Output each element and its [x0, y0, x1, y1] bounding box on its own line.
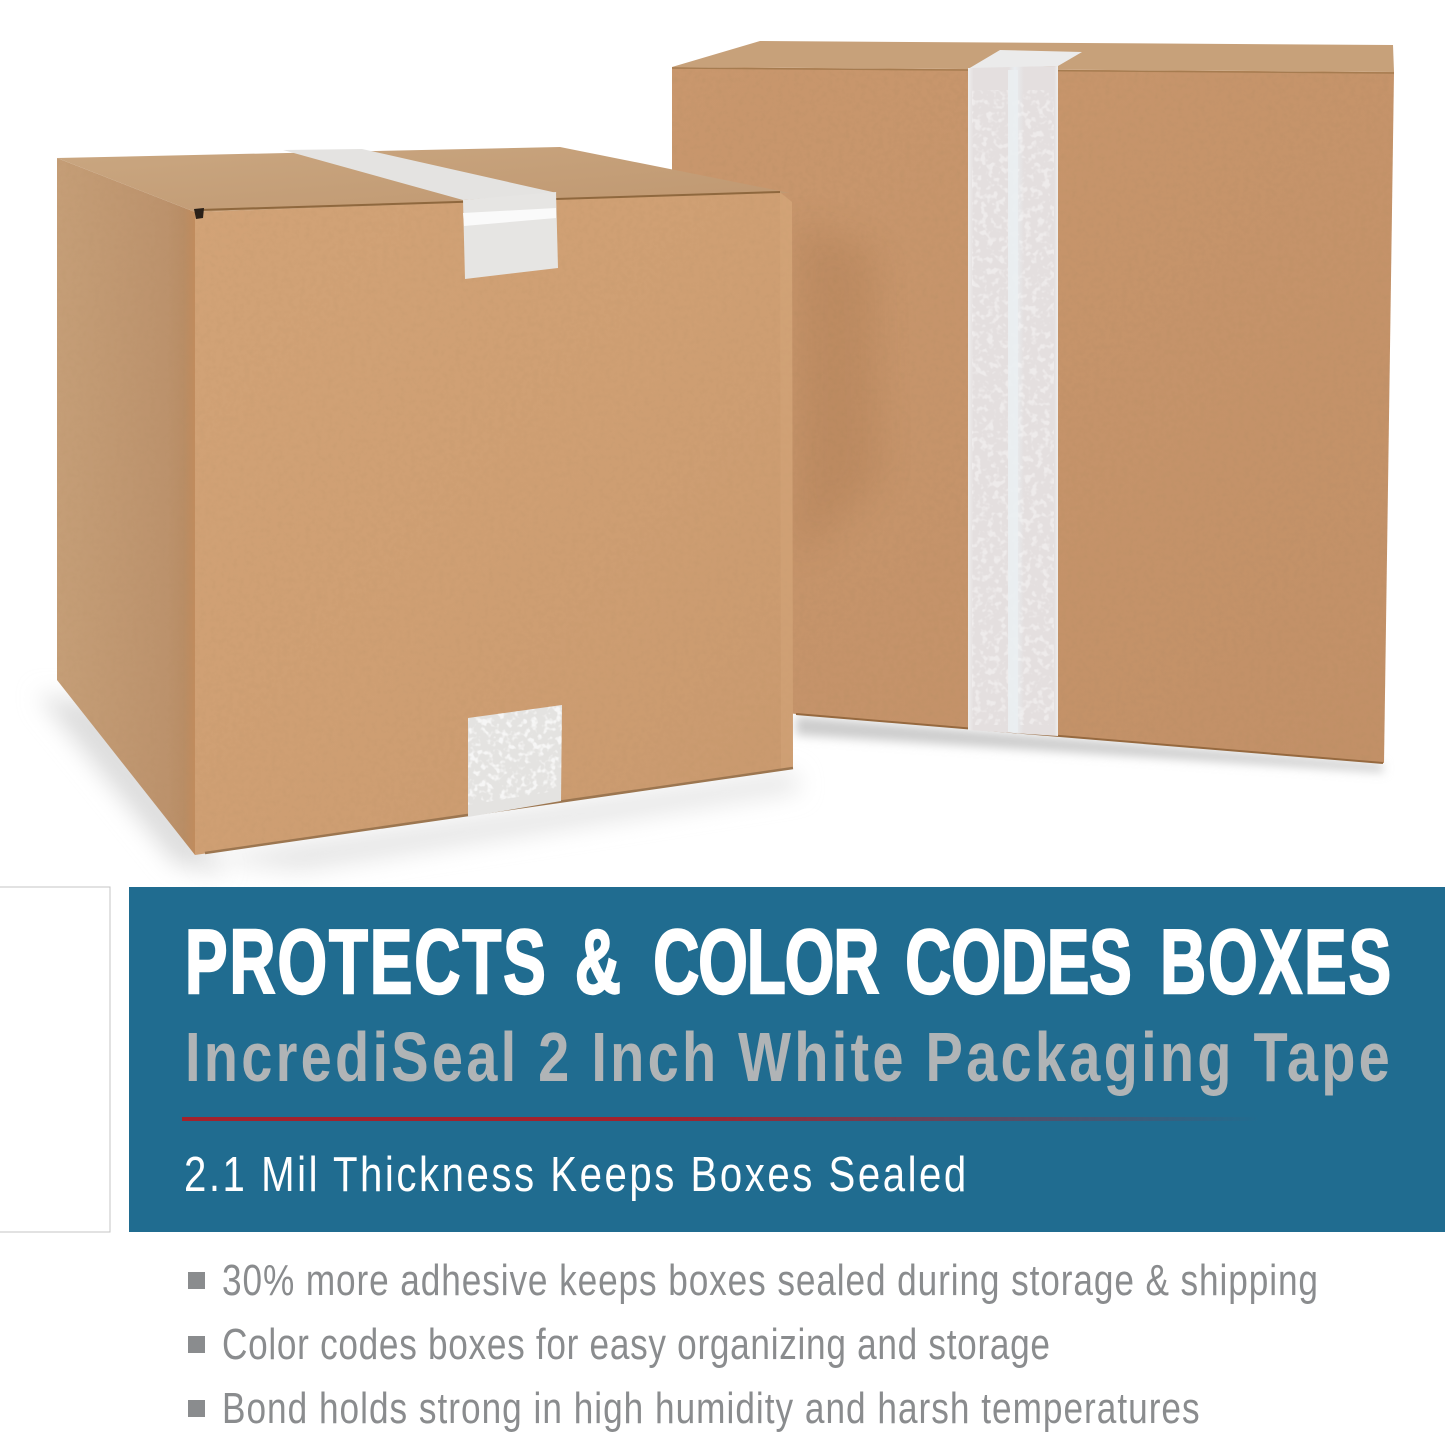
panel: blue banner	[129, 887, 1445, 1232]
heading: &	[575, 911, 623, 1013]
bullet 1: 30% more adhesive keeps boxes sealed during storage & shipping	[222, 1256, 1318, 1305]
red divider	[182, 1117, 1260, 1121]
box: front left	[57, 147, 793, 855]
subheading: IncrediSeal 2 Inch White Packaging Tape	[185, 1019, 1390, 1096]
tape: bottom strip on front box	[468, 705, 562, 817]
photo: cardboard boxes sealed with white tape	[38, 41, 1394, 872]
empty outlined panel	[0, 887, 110, 1232]
bullet list	[188, 1256, 1318, 1433]
tape: top flap on front box	[283, 149, 558, 279]
box: back right	[672, 41, 1394, 763]
tape: vertical strip on back box	[968, 50, 1082, 736]
heading: BOXES	[1160, 911, 1393, 1013]
bullet 2: Color codes boxes for easy organizing and storage	[222, 1320, 1050, 1369]
tagline: 2.1 Mil Thickness Keeps Boxes Sealed	[184, 1147, 966, 1202]
heading: COLOR	[653, 911, 879, 1013]
bullet 3: Bond holds strong in high humidity and harsh temperatures	[222, 1384, 1200, 1433]
heading: CODES	[905, 911, 1132, 1013]
heading: PROTECTS	[185, 911, 548, 1013]
floor shadows	[38, 694, 1383, 872]
